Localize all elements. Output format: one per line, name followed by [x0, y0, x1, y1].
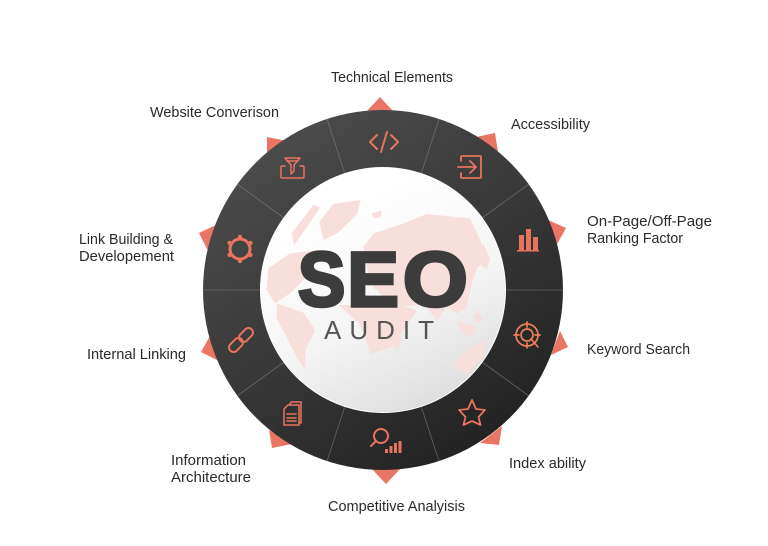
icon: star — [459, 400, 485, 425]
ring: dark audit wheel — [203, 110, 563, 470]
label: On-Page/Off-Page Ranking Factor: Ranking Factor — [587, 231, 683, 247]
title: SEO — [298, 236, 468, 323]
label: Accessibility: Accessibility — [511, 117, 591, 133]
label: Link Building & Developement: Developement — [79, 249, 174, 265]
title: SEO: S — [298, 236, 345, 323]
label: Information Architecture: Architecture — [171, 470, 251, 486]
label: Index ability: Index ability — [509, 456, 587, 472]
title: SEO: O — [403, 236, 468, 322]
label: On-Page/Off-Page Ranking Factor — [587, 214, 712, 247]
icon: keyword target — [514, 322, 540, 348]
label: Internal Linking: Internal Linking — [87, 347, 186, 363]
icon: bar chart — [517, 229, 539, 252]
markers: triangular tabs around the ring — [199, 97, 568, 484]
label: Competitive Analyisis: Competitive Analyisis — [328, 499, 465, 515]
label: Website Converison: Website Converison — [150, 105, 279, 121]
icon: chain link — [227, 326, 255, 354]
icon: documents — [284, 402, 301, 425]
label: Technical Elements: Technical Elements — [331, 70, 453, 86]
icon: login arrow — [458, 156, 481, 178]
label: On-Page/Off-Page Ranking Factor: On-Page/Off-Page — [587, 214, 712, 230]
label: Keyword Search: Keyword Search — [587, 342, 690, 358]
label: Link Building & Developement — [79, 232, 174, 265]
icon: code brackets — [370, 132, 398, 152]
title: SEO: E — [347, 237, 399, 323]
label: Link Building & Developement: Link Building & — [79, 232, 173, 248]
label: Information Architecture: Information — [171, 453, 246, 469]
icon: competitive search and chart — [371, 429, 402, 453]
icon: conversion funnel — [281, 158, 304, 178]
icon: gear — [227, 235, 253, 263]
subtitle: AUDIT: AUDIT — [324, 315, 434, 345]
label: Information Architecture — [171, 453, 251, 486]
globe: world map disc — [260, 167, 506, 413]
